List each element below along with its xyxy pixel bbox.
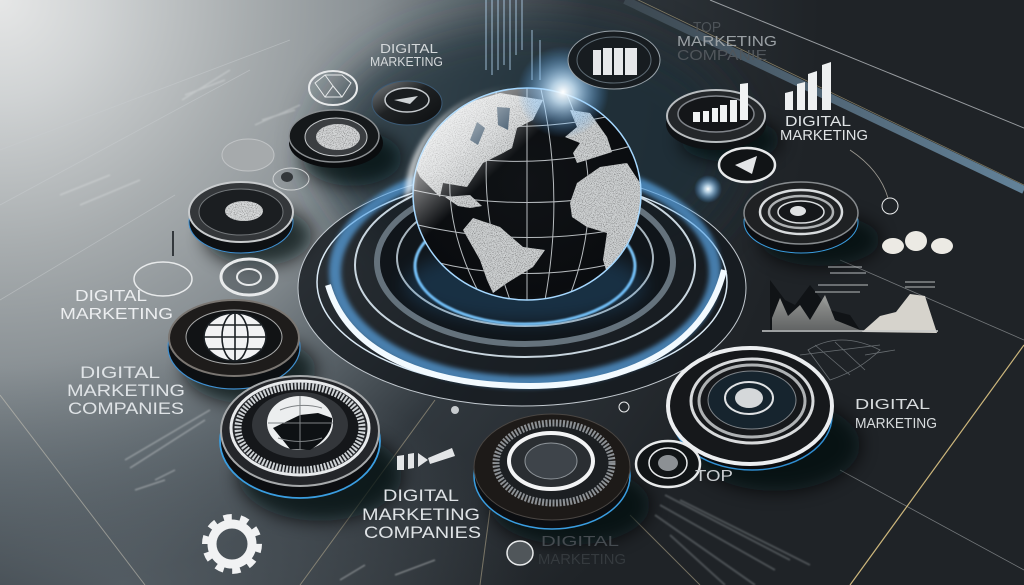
globe [405,46,642,305]
sketch detail: scribbles [60,70,435,580]
small ring icons [134,71,898,565]
label: right upper: DIGITAL [785,113,851,130]
icon: small globe [267,396,333,450]
disc shadows [184,118,880,545]
label: bottom center: COMPANIES [364,523,481,542]
device: bar chart disc [666,83,766,150]
device: right disc [744,182,858,253]
hatch detail: bottom right [655,495,810,585]
icon: white pebbles [882,231,953,254]
label: left lower: MARKETING [67,381,185,400]
top light beam [486,0,540,80]
label: left lower [67,363,185,418]
label: right lower: DIGITAL [855,396,930,413]
icon: globe [204,313,266,361]
label: bottom faded: DIGITAL [541,533,619,550]
device: top center chart disc [568,31,660,89]
label: left [60,288,173,323]
device: bottom center disc [474,414,630,529]
label: top center: DIGITAL [380,41,438,56]
label: bottom center: MARKETING [362,505,480,524]
device: globe icon disc [168,300,300,389]
label: left: MARKETING [60,306,173,323]
label: top bottom: TOP [695,468,733,485]
label: bottom center: DIGITAL [383,486,459,505]
device: left disc [189,182,293,253]
label: right lower [855,396,937,432]
icon: gear [206,518,258,570]
central ring platform [298,162,746,406]
label: left: DIGITAL [75,288,147,305]
label: left lower: DIGITAL [80,363,160,382]
label: top center [370,41,443,69]
label: top right faded: TOP [693,19,721,36]
chart: right area chart [762,267,938,380]
device: upper left disc [289,110,383,168]
label: bottom center [362,486,481,542]
label: right upper: MARKETING [780,127,868,144]
label: top center: MARKETING [370,54,443,69]
label: left lower: COMPANIES [68,399,184,418]
bar chart [693,83,748,122]
continents [412,93,642,293]
device: top left small disc [372,81,442,125]
icon: bottom arrow bars [397,448,455,470]
device: lower right disc [668,348,832,470]
label: bottom faded [538,533,626,568]
label: top right faded: MARKETING [677,33,777,50]
label: top right faded: COMPANIE [677,47,767,64]
label: bottom faded: MARKETING [538,551,626,568]
device: lower left disc [220,376,380,498]
label: right lower: MARKETING [855,415,937,432]
lens flare [694,175,722,203]
icon: large bar chart top right [785,62,831,110]
label: right upper [780,113,868,144]
label: top right faded [677,19,777,64]
